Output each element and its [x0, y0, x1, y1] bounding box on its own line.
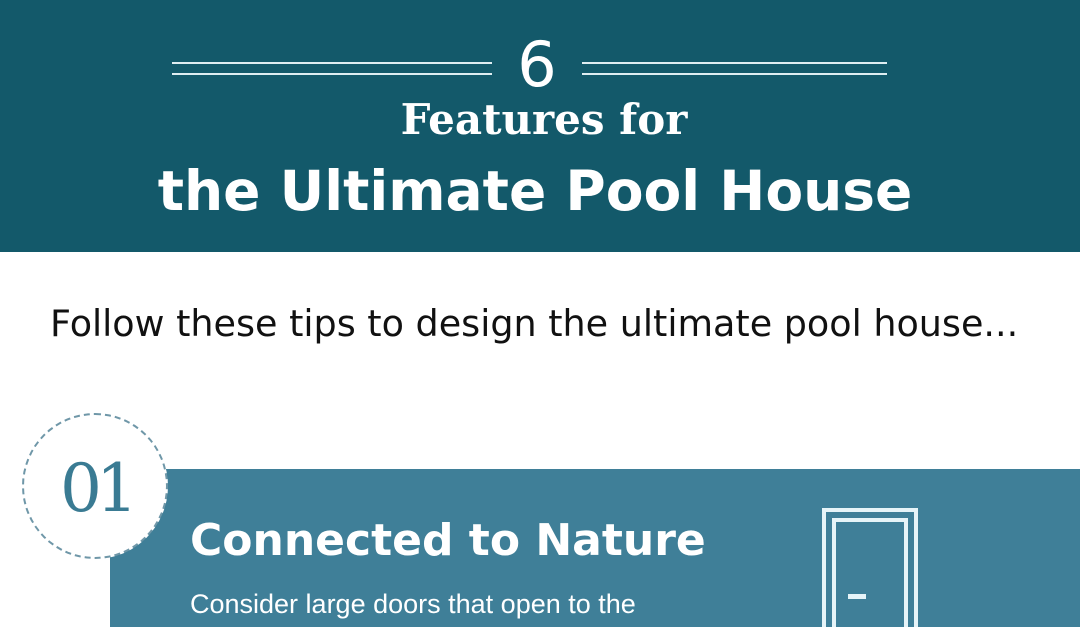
number six: 6: [517, 28, 557, 101]
header band: [0, 0, 1080, 252]
decorative lines left: [172, 62, 492, 64]
badge: 01: [22, 413, 168, 559]
main title: the Ultimate Pool House: [158, 159, 912, 223]
body text: Consider large doors that open to the: [190, 589, 636, 619]
intro text: Follow these tips to design the ultimate pool house...: [50, 302, 1018, 345]
heading: Connected to Nature: [190, 515, 706, 566]
subtitle: features for: Features for: [401, 95, 687, 144]
badge: 01: 01: [60, 450, 132, 527]
panel: connected to nature: [110, 469, 1080, 627]
icon: door: [822, 508, 918, 627]
